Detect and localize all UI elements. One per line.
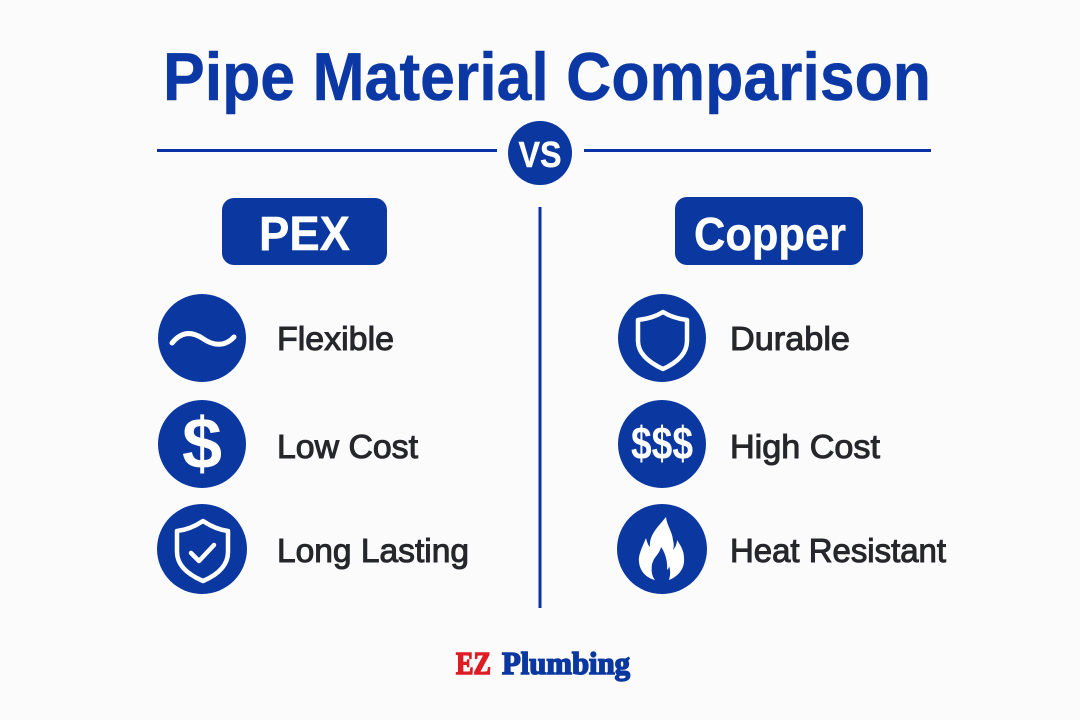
heading: Copper — [675, 197, 863, 265]
text: Flexible: Flexible — [277, 320, 394, 357]
icon: wave — [158, 294, 246, 382]
heading: PEX — [222, 198, 387, 265]
logo: EZ Plumbing: Plumbing — [502, 645, 630, 681]
VS badge — [508, 121, 572, 185]
icon: dollar — [158, 400, 246, 488]
text: Low Cost: Low Cost — [277, 428, 418, 465]
text: Heat Resistant: Heat Resistant — [730, 532, 946, 569]
icon: triple dollar — [618, 400, 706, 488]
icon: dollar: $ — [182, 404, 222, 484]
text: Durable: Durable — [730, 320, 850, 357]
panel: Copper — [617, 197, 946, 594]
text: High Cost: High Cost — [730, 428, 880, 465]
logo: EZ Plumbing: EZ — [456, 645, 491, 681]
heading: Copper: Copper — [694, 208, 846, 260]
icon: shield — [618, 294, 706, 382]
title: Pipe Material Comparison — [163, 39, 931, 115]
VS badge: VS — [518, 134, 562, 175]
icon: flame — [617, 504, 707, 594]
heading: PEX: PEX — [259, 208, 350, 261]
text: Long Lasting: Long Lasting — [277, 532, 469, 569]
icon: shield with check — [157, 504, 247, 594]
icon: triple dollar: $$$ — [631, 417, 693, 469]
panel: PEX — [157, 198, 469, 594]
